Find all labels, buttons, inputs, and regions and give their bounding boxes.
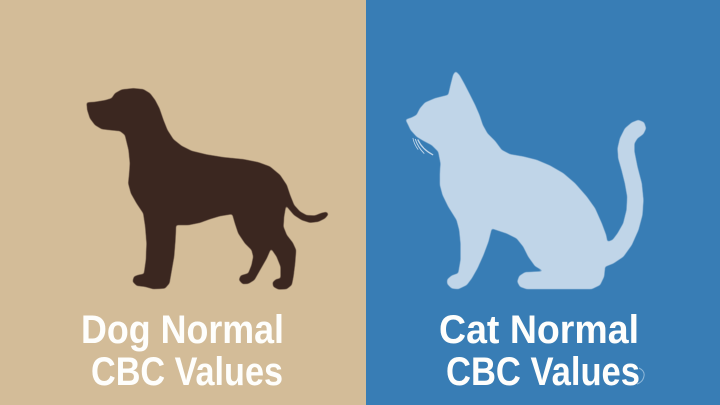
title: dog: CBC Values <box>91 350 283 394</box>
icon: cat silhouette <box>406 71 646 289</box>
title: dog <box>81 308 284 394</box>
panel: dog <box>0 0 366 405</box>
ghost letter artifact <box>637 368 644 384</box>
panel background: tan <box>0 0 366 405</box>
title: dog: Dog Normal <box>81 308 284 352</box>
panel background: blue <box>366 0 720 405</box>
title: cat: Cat Normal <box>439 308 639 352</box>
title: cat <box>439 308 640 394</box>
icon: dog silhouette <box>87 88 328 289</box>
icon: cat whiskers <box>413 138 433 155</box>
panel: cat <box>366 0 720 405</box>
title: cat: CBC Values <box>446 350 640 394</box>
